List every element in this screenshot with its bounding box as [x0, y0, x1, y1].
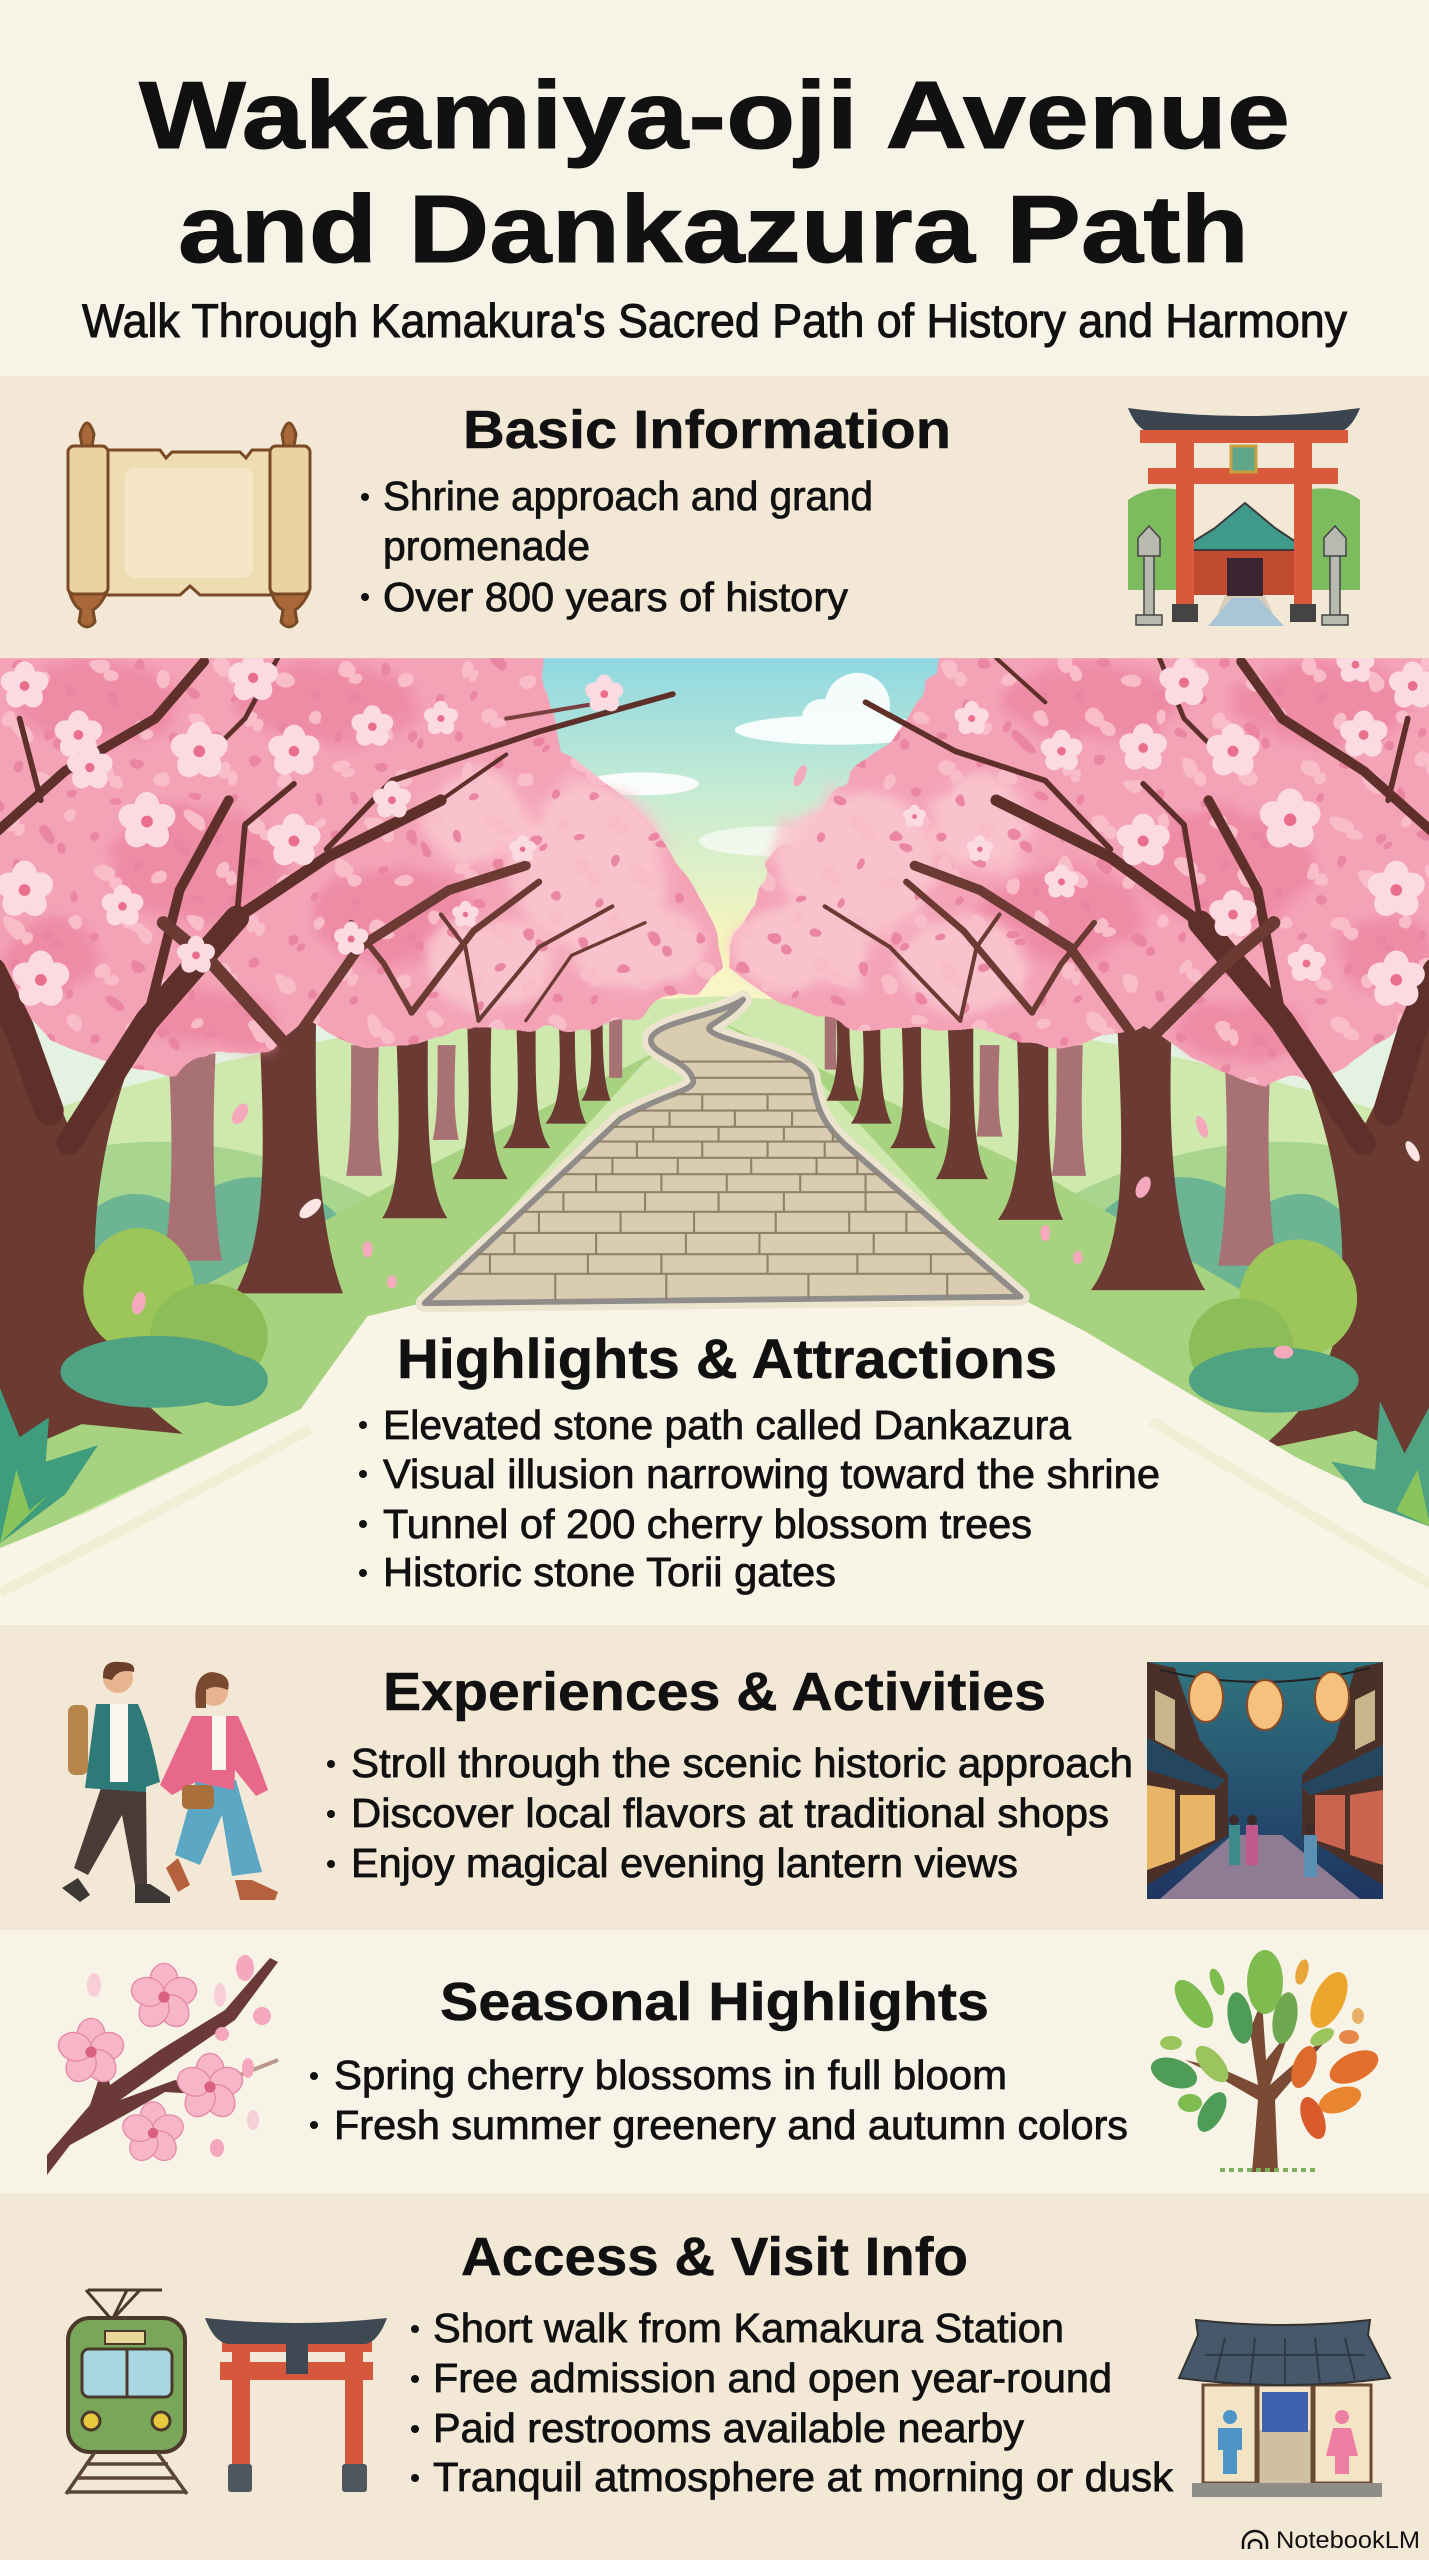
bullet list: seasonal [310, 2052, 1128, 2148]
bullet list: highlights: Historic stone Torii gates [383, 1549, 836, 1595]
icon: cherry branch [47, 1955, 278, 2175]
bullet list: seasonal: Spring cherry blossoms in full bloom [334, 2052, 1007, 2098]
right foliage [728, 645, 1429, 1088]
icon: scroll [68, 423, 310, 627]
bullet list: highlights: Tunnel of 200 cherry blossom trees [383, 1501, 1032, 1547]
bullet list: seasonal: Fresh summer greenery and autumn colors [334, 2102, 1128, 2148]
pale sky at the edges [32, 1020, 1397, 1108]
cream lower path [0, 1302, 1429, 1568]
clouds [597, 672, 906, 856]
grass tufts [0, 1388, 1429, 1543]
title [139, 62, 1290, 283]
panel: access and visit info [0, 2193, 1429, 2560]
right bush [1189, 1240, 1359, 1413]
bullet list: basic information: Over 800 years of history [383, 574, 849, 620]
bullet list: experiences [327, 1740, 1133, 1886]
icon: red torii gate [205, 2318, 387, 2492]
bullet list: access [411, 2305, 1174, 2500]
grass [0, 1056, 652, 1548]
header band [0, 0, 1429, 376]
icon: torii and shrine [1128, 408, 1360, 626]
bullet list: basic information: promenade [383, 523, 590, 569]
large left tree [0, 658, 673, 1445]
large right tree [866, 658, 1429, 1453]
left bush [60, 1228, 268, 1408]
sky [408, 658, 1022, 1000]
falling petals [130, 763, 1423, 1359]
icon: restroom building [1179, 2320, 1390, 2497]
title: and Dankazura Path [178, 176, 1249, 283]
heading: basic information: Basic Information [463, 400, 951, 460]
bullet list: basic information [361, 473, 873, 620]
title: Wakamiya-oji Avenue [139, 62, 1290, 169]
NotebookLM logo: NotebookLM [1276, 2527, 1420, 2554]
bullet list: highlights: Visual illusion narrowing toward the shrine [383, 1451, 1160, 1497]
bullet list: access: Tranquil atmosphere at morning or dusk [433, 2454, 1174, 2500]
heading: seasonal highlights: Seasonal Highlights [440, 1972, 989, 2032]
second right tree branches [825, 866, 1274, 1045]
icon: seasonal tree [1147, 1950, 1383, 2172]
heading: access and visit info: Access & Visit Info [461, 2227, 968, 2287]
icon: lantern street at night [1147, 1662, 1383, 1899]
bullet list: access: Paid restrooms available nearby [433, 2405, 1024, 2451]
subtitle: Walk Through Kamakura's Sacred Path of History and Harmony [82, 294, 1347, 347]
stone path [425, 999, 1021, 1303]
heading: highlights and attractions: Highlights & Attractions [397, 1327, 1057, 1390]
bullet list: highlights: Elevated stone path called Dankazura [383, 1402, 1071, 1448]
far faded trees [163, 1013, 1277, 1266]
mid tree trunks [237, 1019, 1206, 1294]
panel: hero cherry blossom avenue [0, 645, 1429, 1627]
bullet list: access: Free admission and open year-round [433, 2355, 1112, 2401]
second left tree branches [163, 866, 645, 1045]
panel: seasonal highlights [0, 1930, 1429, 2193]
cherry blossom flowers [0, 645, 1429, 1011]
bullet list: experiences: Stroll through the scenic historic approach [351, 1740, 1133, 1786]
panel: basic information [0, 376, 1429, 658]
bullet list: access: Short walk from Kamakura Station [433, 2305, 1064, 2351]
icon: walking couple [62, 1662, 278, 1903]
bullet list: experiences: Enjoy magical evening lantern views [351, 1840, 1018, 1886]
panel: experiences and activities [0, 1625, 1429, 1930]
icon: train [66, 2290, 187, 2494]
bullet list: basic information: Shrine approach and grand [383, 473, 873, 519]
left foliage [0, 645, 722, 1071]
bullet list: experiences: Discover local flavors at traditional shops [351, 1790, 1109, 1836]
hills [52, 996, 1372, 1527]
bullet list: highlights [359, 1402, 1160, 1595]
heading: experiences and activities: Experiences & Activities [383, 1662, 1046, 1722]
